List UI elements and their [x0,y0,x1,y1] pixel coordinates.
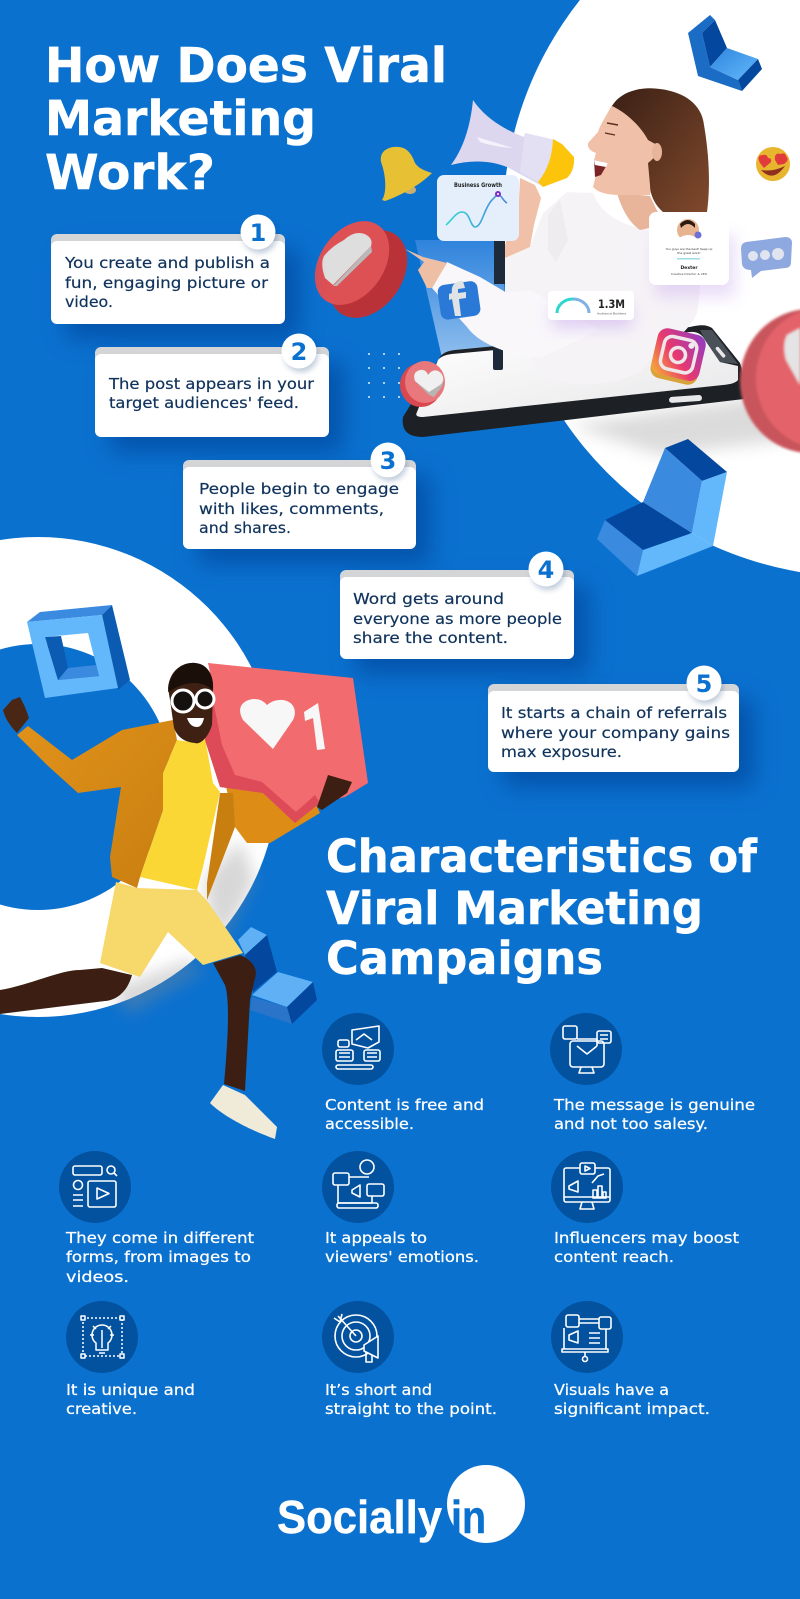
illustration: woman with megaphone on phone [403,88,785,455]
card: Dexter testimonial: Dexter [680,265,698,271]
feature: influencers: content reach. [554,1248,674,1266]
sunglasses [172,690,214,712]
step 3: and shares. [199,519,291,537]
card: Dexter testimonial: the great work! [677,251,701,255]
card: Dexter testimonial: You guys are the best! Keep up [666,247,712,251]
feature: visuals impact [551,1301,710,1418]
card: 1.3M audience: Audience Builders [597,312,626,316]
hand on pinata [317,775,352,810]
feature: influencers: Influencers may boost [554,1229,739,1247]
heading: characteristics [326,830,757,985]
right sleeve [225,782,320,843]
icon: heart-eyes emoji [756,147,790,181]
step 1: video. [65,293,113,311]
feature: content is free: Content is free and [325,1096,484,1114]
step 1 [51,214,300,339]
step 4: everyone as more people [353,610,562,628]
step 2: target audiences' feed. [109,394,299,412]
step 3: with likes, comments, [199,500,384,518]
step 4: 4 [538,556,554,584]
one on pinata [304,703,325,750]
card: Dexter testimonial: Creative Director & CEO [671,272,708,276]
pinata like [205,663,368,823]
feature: message genuine: The message is genuine [553,1096,755,1114]
step 5: 5 [696,670,712,698]
pointing arm sleeve [432,262,600,358]
icon: big heart button [299,207,423,333]
step 3 [183,442,431,564]
head [168,663,213,743]
title: How Does Viral [45,38,447,94]
card: 1.3M audience [548,291,634,328]
feature: different forms: videos. [66,1268,129,1286]
icon: blue chair center [597,439,727,576]
feature: short and straight: It’s short and [325,1381,432,1399]
step 5 [488,666,754,787]
feature: different forms: They come in different [65,1229,254,1247]
jacket right [207,793,235,900]
step 1: You create and publish a [64,254,270,272]
feature: visuals impact: significant impact. [554,1400,710,1418]
step 4: Word gets around [353,590,504,608]
woman [405,88,709,384]
heading: characteristics: Viral Marketing [326,882,703,935]
heading: characteristics: Characteristics of [326,830,757,883]
feature: different forms [59,1151,254,1286]
step 4: share the content. [353,629,508,647]
step 2: 2 [291,338,307,366]
stand pole [493,238,505,370]
step 2: The post appears in your [108,375,315,393]
white circle: top right [503,0,800,577]
phone [403,325,785,455]
shoe [210,1085,277,1139]
feature: different forms: forms, from images to [66,1248,251,1266]
step 1: 1 [250,219,266,247]
pointing hand [405,249,447,288]
feature: unique creative: It is unique and [66,1381,195,1399]
feature: appeals to emotions: viewers' emotions. [325,1248,479,1266]
heart on pinata [240,699,295,749]
icon: instagram [649,326,708,387]
card: Dexter testimonial [649,212,735,297]
card: 1.3M audience: 1.3M [598,297,625,311]
feature: short and straight: straight to the point. [325,1400,497,1418]
feature: content is free [322,1013,484,1133]
step 5: where your company gains [501,724,730,742]
title: Marketing [45,91,316,147]
megaphone [451,100,574,187]
icon: small chair near man [238,927,317,1024]
icon: blurred heart button right [740,308,800,453]
feature: unique creative: creative. [66,1400,137,1418]
step 3: 3 [380,447,396,475]
title: Work? [45,145,215,201]
ring shadow [110,840,255,1015]
icon: blue chair top right [688,15,762,91]
white ring: left [0,537,278,1017]
heading: characteristics: Campaigns [326,932,603,985]
back leg [0,968,132,1014]
feature: content is free: accessible. [325,1115,414,1133]
front leg [213,955,256,1091]
light beam [415,240,510,358]
card: business growth [437,175,519,241]
feature: message genuine [550,1013,755,1133]
feature: influencers [551,1151,739,1266]
raised hand [3,697,29,733]
step 5: It starts a chain of referrals [501,704,727,722]
step 1: fun, engaging picture or [65,274,269,292]
step 4 [340,552,589,674]
step 5: max exposure. [501,743,622,761]
illustration: man with like pinata [0,663,368,1139]
logo: Socially in: Socially [277,1491,442,1543]
feature: unique creative [66,1301,195,1418]
dot grid [368,353,400,398]
icon: facebook [437,280,481,320]
title [45,38,447,201]
yellow shirt [140,738,220,890]
shorts [100,882,243,977]
card: business growth: Business Growth [454,183,502,189]
icon: small heart button [400,361,445,407]
feature: appeals to emotions: It appeals to [325,1229,427,1247]
step 2 [95,334,344,452]
icon: square frame cube [27,605,130,698]
feature: short and straight [322,1301,497,1418]
jacket left [17,720,177,888]
holding arm [505,178,541,258]
icon: chat bubble [741,237,792,278]
logo: Socially in: in [451,1491,486,1543]
feature: visuals impact: Visuals have a [554,1381,669,1399]
icon: bell [381,147,432,201]
step 3: People begin to engage [199,480,399,498]
logo: Socially in [277,1465,525,1543]
feature: appeals to emotions [322,1151,479,1266]
feature: message genuine: and not too salesy. [554,1115,708,1133]
